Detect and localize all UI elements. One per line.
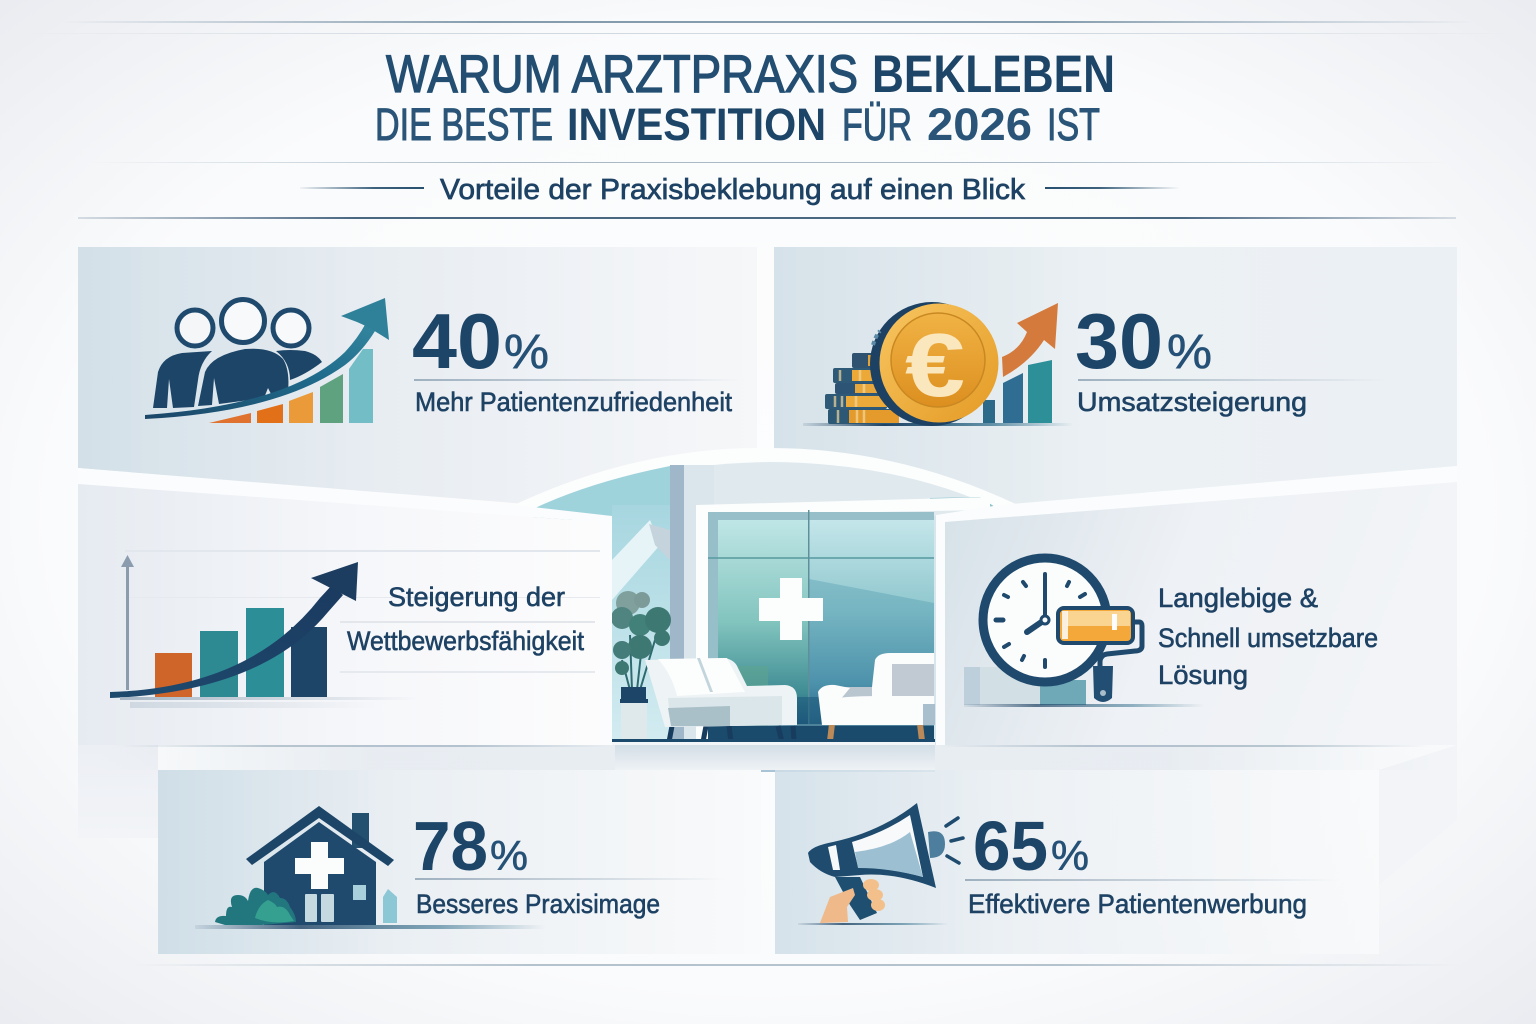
header rules [20, 21, 1516, 219]
label: Mehr Patientenzufriedenheit [415, 387, 732, 417]
icon: euro coin with arrow: € [905, 316, 965, 416]
icon: people with rising arrow [145, 298, 389, 423]
label [347, 582, 584, 656]
title: WARUM ARZTPRAXIS [386, 45, 858, 104]
label: Lösung [1158, 660, 1248, 690]
coin stack [825, 353, 899, 424]
panel: revenue: % [1167, 326, 1212, 379]
label: Umsatzsteigerung [1077, 387, 1307, 417]
label: Langlebige & [1158, 583, 1318, 613]
panel: patient satisfaction [78, 247, 757, 510]
plant [611, 591, 671, 740]
label: Effektivere Patientenwerbung [968, 889, 1307, 919]
panel: faint lower right strip [1379, 745, 1457, 885]
icon: bar chart with rising arrow [110, 555, 420, 708]
panel: quick solution [945, 482, 1457, 745]
sofa [645, 658, 797, 742]
title: BEKLEBEN [872, 45, 1115, 104]
panel: strip below left panel [78, 745, 158, 838]
panel: image: % [490, 832, 528, 879]
floor reflection [100, 745, 1440, 772]
icon: clock and paint roller [964, 558, 1204, 707]
center scene: practice interior [514, 448, 1022, 745]
white cross [759, 578, 823, 640]
label: Schnell umsetzbare [1158, 623, 1378, 653]
title: 2026 [927, 99, 1032, 150]
panel: revenue [774, 247, 1457, 505]
title [375, 45, 1115, 150]
stat: 65 [973, 807, 1048, 885]
bottom rule [130, 964, 1460, 966]
title: DIE BESTE [375, 99, 553, 150]
panel: white frame band [78, 466, 1457, 745]
stat: 40 [412, 297, 502, 385]
stat: 78 [413, 807, 488, 885]
icon: house with cross [195, 806, 545, 929]
label: Besseres Praxisimage [416, 889, 660, 919]
subtitle: Vorteile der Praxisbeklebung auf einen Blick [440, 174, 1026, 206]
icon: megaphone [798, 803, 963, 925]
armchair [818, 653, 935, 741]
panel: image [158, 770, 761, 954]
door glass [708, 510, 934, 740]
panel: patient satisfaction: % [504, 326, 549, 379]
panel: competitiveness [78, 484, 600, 745]
label: Wettbewerbsfähigkeit [347, 626, 584, 656]
label: Steigerung der [388, 582, 565, 612]
title: FÜR [842, 99, 912, 150]
label [1158, 583, 1378, 690]
icon: euro coin with arrow [803, 302, 1073, 426]
panel: advertising: % [1051, 832, 1089, 879]
title: INVESTITION [567, 99, 826, 150]
panel: advertising [775, 770, 1379, 954]
stat: 30 [1075, 297, 1163, 385]
title: IST [1047, 99, 1100, 150]
